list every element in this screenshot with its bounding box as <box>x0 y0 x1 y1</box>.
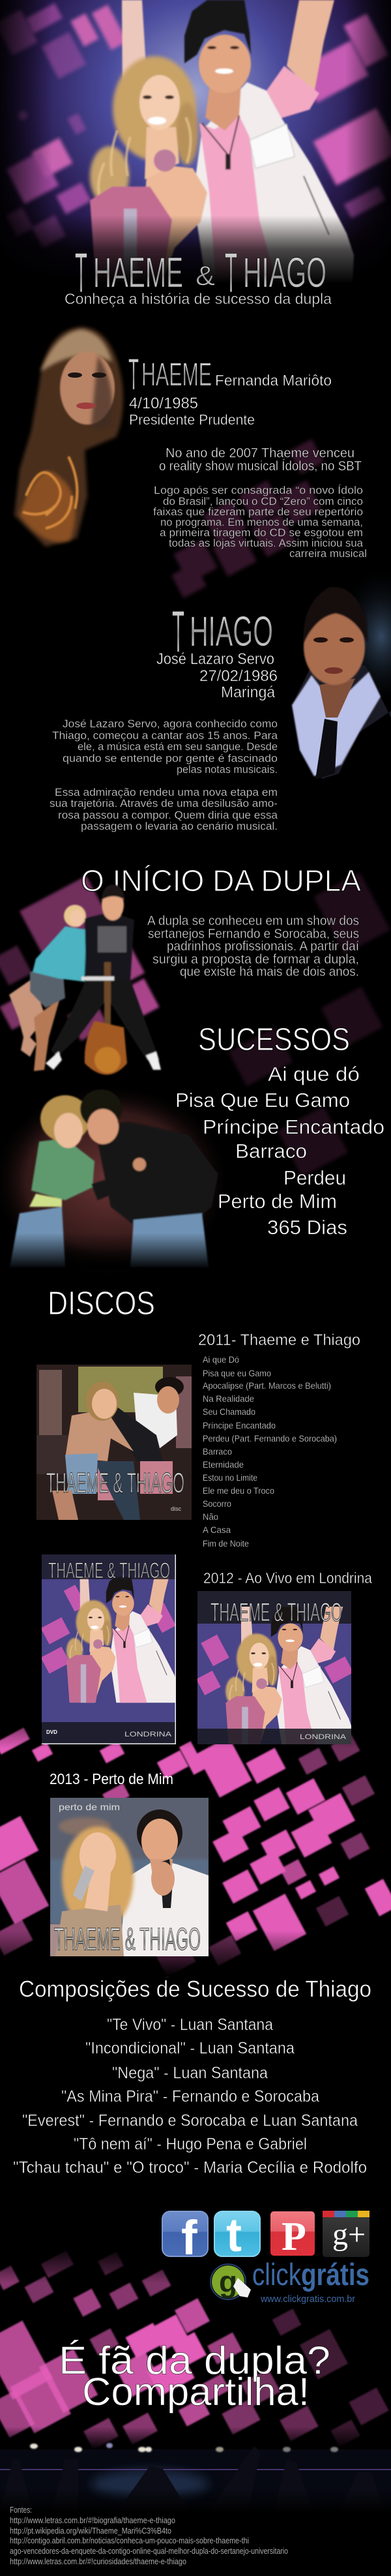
Thiago data <box>156 650 278 701</box>
title: T <box>75 242 87 305</box>
Thaeme birth data: 4/10/1985 <box>129 395 198 412</box>
album cover 2012 DVD: LONDRINA <box>124 1731 172 1738</box>
stage squares behind first duo photo <box>0 875 159 1041</box>
list: hit songs: Pisa Que Eu Gamo <box>175 1089 350 1112</box>
portrait: Thaeme <box>14 327 123 547</box>
track list 2011: Príncipe Encantado <box>203 1420 276 1431</box>
album cover 2012 CD <box>196 1591 353 1751</box>
hero fade <box>0 215 391 284</box>
Thiago paragraph 1: José Lazaro Servo, agora conhecido como <box>63 718 278 730</box>
album cover 2013: THAEME & THIAGO <box>54 1922 201 1957</box>
track list 2011 <box>203 1354 337 1549</box>
track list 2011: Pisa que eu Gamo <box>203 1368 271 1378</box>
hero background: stage lights <box>0 0 391 300</box>
faint stage squares behind Thaeme text <box>171 439 324 598</box>
heading: Thiago: HIAGO <box>190 607 273 655</box>
track list 2011: Eternidade <box>203 1459 244 1470</box>
photo: duo with guitar <box>9 885 161 1075</box>
track list 2011: Estou no Limite <box>203 1472 257 1483</box>
heading: compositions: Composições de Sucesso de Thiago <box>19 1977 371 2002</box>
paragraph: the beginning of the duo: sertanejos Fernando e Sorocaba, seus <box>148 927 359 941</box>
paragraph: the beginning of the duo: padrinhos profissionais. A partir daí <box>167 939 359 954</box>
album cover 2012 DVD <box>41 1554 177 1744</box>
title: HIAGO <box>243 249 326 296</box>
Thaeme paragraph: do Brasil”, lançou o CD “Zero” com cinco <box>163 495 363 508</box>
icon: google plus <box>323 2211 369 2257</box>
heading: Thiago <box>172 599 273 665</box>
sources: Fontes: <box>10 2505 32 2515</box>
Thaeme paragraph: todas as lojas virtuais. Assim iniciou sua <box>169 537 364 549</box>
clickgratis logo: g <box>219 2265 237 2299</box>
Thaeme intro <box>159 446 362 474</box>
Thiago paragraph 1 <box>52 718 278 776</box>
call to action <box>59 2339 330 2414</box>
Thiago paragraph 2: rosa passou a compor. Quem diria que essa <box>58 809 278 821</box>
crowd at the stage <box>0 2427 391 2515</box>
album cover 2011 <box>36 1365 192 1520</box>
title: T <box>225 242 237 305</box>
Thiago paragraph 2 <box>50 786 278 832</box>
stage squares, lower section <box>0 1727 391 1977</box>
Thaeme birth data: Presidente Prudente <box>129 412 255 428</box>
album cover 2013: perto de mim <box>59 1802 120 1812</box>
list: hit songs: Ai que dó <box>268 1063 360 1085</box>
icon: pinterest: P <box>282 2215 306 2259</box>
Thiago paragraph 2: Essa admiração rendeu uma nova etapa em <box>55 786 278 798</box>
Thiago paragraph 2: passagem o levaria ao cenário musical. <box>81 820 278 832</box>
title: & <box>195 260 215 291</box>
list: compositions: "Te Vivo" - Luan Santana <box>107 2016 273 2034</box>
icon: facebook <box>162 2211 208 2265</box>
sources: ago-vencedores-da-enquete-da-contigo-online-qual-melhor-dupla-do-sertanejo-universitario <box>10 2546 288 2556</box>
Thaeme paragraph <box>153 484 367 560</box>
track list 2011: Barraco <box>203 1446 232 1457</box>
Thiago paragraph 1: pelas notas musicais. <box>177 763 278 776</box>
heading: Thaeme: HAEME <box>141 356 212 393</box>
sources: http://www.letras.com.br/#!biografia/thaeme-e-thiago <box>10 2515 175 2525</box>
portrait: Thiago <box>292 565 391 780</box>
paragraph: the beginning of the duo: que existe há mais de dois anos. <box>180 965 359 979</box>
sources: http://pt.wikipedia.org/wiki/Thaeme_Mari%C3%B4to <box>10 2526 171 2536</box>
sources <box>10 2505 288 2566</box>
bottom stage squares <box>0 2250 389 2449</box>
list: compositions: "Nega" - Luan Santana <box>112 2064 268 2082</box>
list: compositions: "Incondicional" - Luan Santana <box>85 2039 295 2057</box>
list: compositions <box>13 2016 367 2177</box>
track list 2011: A Casa <box>203 1524 231 1535</box>
icon: google plus: g+ <box>332 2217 366 2252</box>
list: hit songs: 365 Dias <box>267 1216 347 1239</box>
Thaeme intro: o reality show musical Ídolos, no SBT <box>159 459 362 474</box>
heading: Thaeme <box>128 350 332 399</box>
Thiago paragraph 1: ele, a música está em seu sangue. Desde <box>78 740 278 753</box>
faint stage squares on the right <box>229 872 390 1177</box>
list: hit songs: Perdeu <box>283 1166 346 1189</box>
heading: Thaeme: T <box>128 350 139 399</box>
Thaeme paragraph: carreira musical <box>289 547 367 560</box>
album heading 2012: 2012 - Ao Vivo em Londrina <box>203 1569 372 1586</box>
heading: Thaeme: Fernanda Mariôto <box>215 372 332 389</box>
album cover 2012 DVD: THAEME & THIAGO <box>48 1558 170 1583</box>
track list 2011: Não <box>203 1511 218 1522</box>
track list 2011: Socorro <box>203 1498 231 1509</box>
list: hit songs: Perto de Mim <box>218 1190 337 1213</box>
social icons <box>162 2209 369 2265</box>
track list 2011: Fim de Noite <box>203 1538 249 1549</box>
list: compositions: "Everest" - Fernando e Sorocaba e Luan Santana <box>22 2112 358 2130</box>
subtitle: Conheça a história de sucesso da dupla <box>65 290 332 307</box>
Thaeme paragraph: no programa. Em menos de uma semana, <box>160 516 363 528</box>
Thiago paragraph 1: Thiago, começou a cantar aos 15 anos. Para <box>52 729 278 742</box>
icon: facebook: f <box>181 2211 197 2265</box>
Thiago paragraph 1: quando se entende por gente é fascinado <box>63 752 278 765</box>
album cover 2011: THAEME & THIAGO <box>46 1467 184 1499</box>
album cover 2012 CD: LONDRINA <box>300 1733 347 1741</box>
album heading 2013: 2013 - Perto de Mim <box>50 1770 173 1787</box>
title <box>75 242 326 305</box>
sources: http://contigo.abril.com.br/noticias/conheca-um-pouco-mais-sobre-thaeme-thi <box>10 2536 249 2545</box>
icon: twitter: t <box>226 2209 242 2262</box>
list: compositions: "Tchau tchau" e "O troco" - Maria Cecília e Rodolfo <box>13 2159 367 2177</box>
heading: Sucessos: SUCESSOS <box>198 1022 350 1057</box>
clickgratis logo: www.clickgratis.com.br <box>260 2294 355 2305</box>
list: compositions: "As Mina Pira" - Fernando e Sorocaba <box>61 2087 319 2106</box>
icon: twitter <box>214 2209 260 2262</box>
paragraph: the beginning of the duo <box>147 914 359 979</box>
album cover 2012 DVD: DVD <box>46 1729 57 1735</box>
top fade of lower section <box>0 1696 391 1748</box>
track list 2011: Ai que Dó <box>203 1354 239 1365</box>
title: HAEME <box>93 249 183 296</box>
Thaeme intro: No ano de 2007 Thaeme venceu <box>166 446 355 461</box>
heading: Discos: DISCOS <box>48 1284 155 1322</box>
track list 2011: Seu Chamado <box>203 1406 255 1417</box>
paragraph: the beginning of the duo: surgiu a proposta de formar a dupla, <box>152 952 359 967</box>
Thaeme paragraph: Logo após ser consagrada “o novo Ídolo <box>154 484 363 496</box>
clickgratis logo <box>210 2257 369 2305</box>
album cover 2013 <box>50 1798 209 1957</box>
call to action: É fã da dupla? <box>59 2339 330 2382</box>
Thiago data: Maringá <box>221 684 276 701</box>
track list 2011: Apocalipse (Part. Marcos e Belutti) <box>203 1380 331 1391</box>
track list 2011: Perdeu (Part. Fernando e Sorocaba) <box>203 1433 337 1444</box>
paragraph: the beginning of the duo: A dupla se conheceu em um show dos <box>147 914 359 928</box>
call to action: Compartilha! <box>82 2370 310 2414</box>
list: hit songs: Barraco <box>235 1140 307 1162</box>
photo: duo dancing <box>0 1083 231 1279</box>
hero photo: Thaeme and Thiago <box>90 0 354 300</box>
Thiago paragraph 2: sua trajetória. Através de uma desilusão amo- <box>50 797 278 810</box>
sources: http://www.letras.com.br/#!curiosidades/thaeme-e-thiago <box>10 2556 186 2566</box>
hero base <box>0 283 391 303</box>
top fade of bottom section <box>0 2244 391 2283</box>
album cover 2011: disc <box>171 1506 182 1512</box>
album heading 2011: 2011- Thaeme e Thiago <box>198 1331 360 1349</box>
icon: pinterest <box>270 2211 315 2259</box>
list: hit songs: Príncipe Encantado <box>203 1115 384 1138</box>
track list 2011: Ele me deu o Troco <box>203 1485 274 1496</box>
heading: Thiago: T <box>172 599 184 665</box>
clickgratis logo: clickgrátis <box>252 2257 369 2292</box>
Thiago data: 27/02/1986 <box>199 667 278 685</box>
list: compositions: "Tô nem aí" - Hugo Pena e Gabriel <box>74 2135 307 2153</box>
Thaeme birth data <box>129 395 255 428</box>
Thaeme paragraph: a primeira tiragem do CD se esgotou em <box>160 526 363 539</box>
track list 2011: Na Realidade <box>203 1393 254 1404</box>
Thaeme paragraph: faixas que fizeram parte de seu repertório <box>153 506 363 518</box>
heading: O início da dupla: O INÍCIO DA DUPLA <box>81 864 361 898</box>
bottom fade of lower section <box>0 1931 391 1977</box>
Thiago data: José Lazaro Servo <box>156 650 274 668</box>
list: hit songs <box>175 1063 384 1239</box>
